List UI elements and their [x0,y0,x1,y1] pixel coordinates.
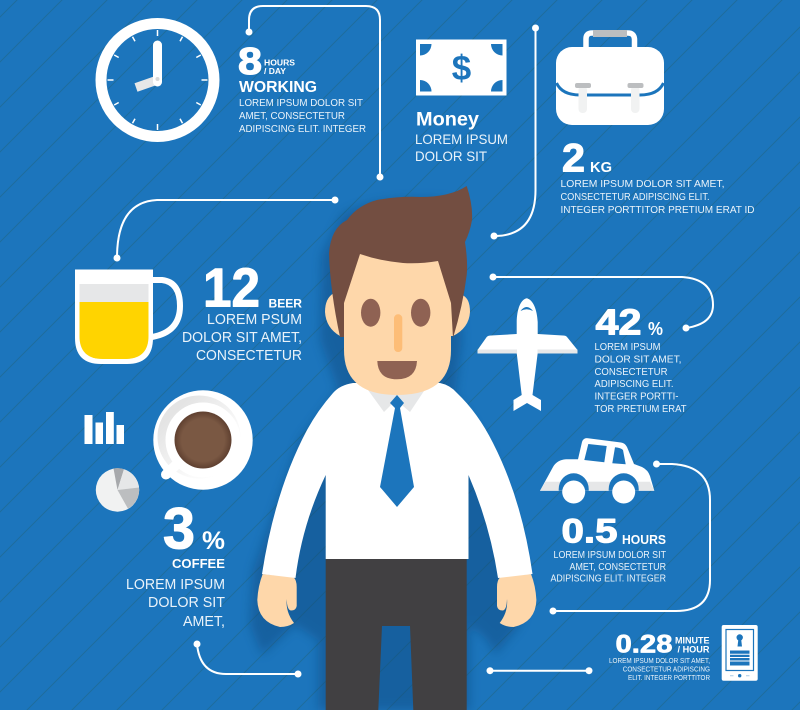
text: 2 kg: CONSECTETUR ADIPISCING ELIT. [560,191,710,203]
text: 42%: INTEGER PORTTI- [594,392,678,402]
icon: pie chart [96,468,139,512]
text: 8 hours working [238,41,366,135]
text: 42%: % [648,319,663,339]
figure shadow [250,199,528,710]
text: 0.5 hours: ADIPISCING ELIT. INTEGER [550,574,666,584]
collar [368,390,424,412]
text: 0.28 minute per hour: LOREM IPSUM DOLOR SIT AMET, [609,656,710,665]
shirt [262,383,532,578]
tie [380,395,414,507]
text: 3% coffee: COFFEE [172,557,225,571]
text: 42%: DOLOR SIT AMET, [594,354,682,366]
text: 2 kg [560,136,755,216]
icon: briefcase [556,30,664,125]
text: 8 hours working: / DAY [264,67,287,76]
icon: beer mug [75,270,180,364]
text: 0.28 minute per hour: / HOUR [678,644,710,654]
icon: banknote [416,40,506,96]
text: money: DOLOR SIT [415,148,487,164]
trousers [326,556,467,710]
text: 2 kg: LOREM IPSUM DOLOR SIT AMET, [560,178,724,190]
text: 0.5 hours [550,512,666,584]
icon: tablet [722,625,758,681]
text: 8 hours working: AMET, CONSECTETUR [239,110,345,122]
icon: airplane [478,298,578,411]
icon: banknote: $ [452,49,471,88]
text: 3% coffee: DOLOR SIT [148,595,225,611]
text: 0.28 minute per hour [609,630,710,682]
text: 12 beer: BEER [268,298,303,310]
text: money [415,110,508,164]
nose [394,314,402,352]
mouth [377,361,417,379]
right hand [497,574,536,627]
connector: tablet line [486,667,592,674]
text: 8 hours working: HOURS [264,58,296,68]
text: 12 beer: DOLOR SIT AMET, [182,330,302,346]
icon: car [540,438,654,504]
text: 12 beer: LOREM PSUM [207,312,302,328]
text: 3% coffee: 3 [163,496,195,562]
eyes [361,299,380,327]
text: 2 kg: KG [590,159,612,176]
text: 0.28 minute per hour: ELIT. INTEGER PORTTITOR [628,673,710,682]
connector: briefcase line [490,24,539,240]
text: 2 kg: 2 [562,136,585,180]
icon: bar chart [84,412,124,444]
figure: businessman [257,186,536,710]
text: 0.28 minute per hour: 0.28 [616,630,673,658]
text: 12 beer: CONSECTETUR [196,348,302,364]
connector: plane line [490,274,713,332]
ears [325,293,346,336]
text: 42%: CONSECTETUR [594,367,668,378]
connector: car line [550,460,710,614]
text: 8 hours working: WORKING [239,79,317,96]
text: 2 kg: INTEGER PORTTITOR PRETIUM ERAT ID [560,204,755,216]
icon: coffee cup [153,390,253,490]
text: 3% coffee: LOREM IPSUM [126,577,225,593]
text: 12 beer [182,256,303,364]
text: 3% coffee [126,496,225,630]
connector: coffee line [194,640,302,678]
text: money: LOREM IPSUM [415,131,508,147]
text: 0.28 minute per hour: MINUTE [675,636,710,646]
text: 0.5 hours: AMET, CONSECTETUR [570,562,666,573]
text: 0.28 minute per hour: CONSECTETUR ADIPISCING [623,664,710,674]
text: 8 hours working: LOREM IPSUM DOLOR SIT [239,97,364,109]
text: 0.5 hours: 0.5 [562,512,618,550]
text: 0.5 hours: HOURS [622,532,666,547]
text: 12 beer: 12 [203,256,260,318]
text: 8 hours working: 8 [238,41,262,83]
face [344,250,451,395]
text: 3% coffee: % [202,527,225,555]
text: money: Money [416,110,479,130]
text: 42%: 42 [596,302,642,342]
connector: working line [246,6,384,180]
connector: beer line [114,196,338,262]
text: 3% coffee: AMET, [183,614,225,630]
left hand [257,574,297,627]
text: 8 hours working: ADIPISCING ELIT. INTEGER [239,123,366,135]
text: 0.5 hours: LOREM IPSUM DOLOR SIT [554,550,666,561]
text: 42%: ADIPISCING ELIT. [594,379,674,390]
text: 42%: TOR PRETIUM ERAT [594,404,686,415]
text: 42%: LOREM IPSUM [594,342,660,353]
icon: clock [101,24,214,136]
hair [329,186,472,338]
text: 42% [594,302,686,415]
